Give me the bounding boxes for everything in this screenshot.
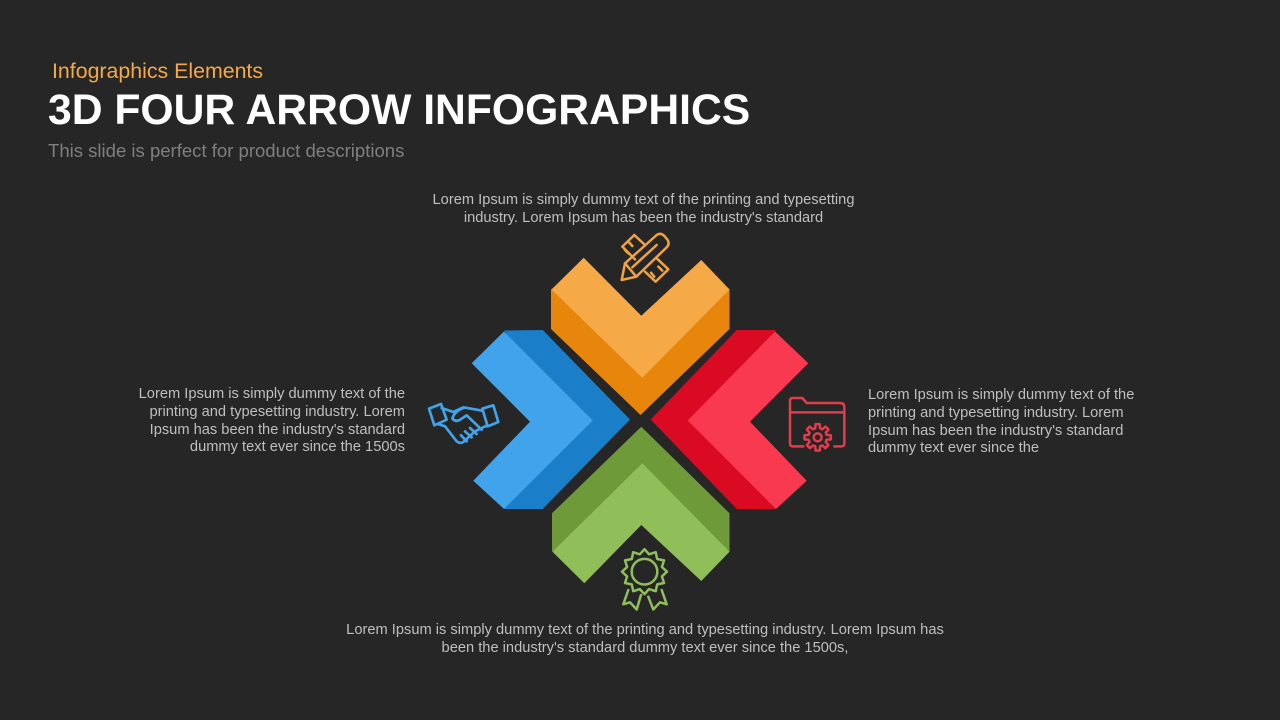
text block: left <box>139 386 405 455</box>
arrow: green, pointing up <box>552 427 730 583</box>
text block: right <box>868 387 1134 456</box>
text block: right: dummy text ever since the <box>868 440 1039 456</box>
arrow: blue, pointing right <box>472 330 630 509</box>
text block: right: Lorem Ipsum is simply dummy text of the <box>868 387 1134 403</box>
icon: folder with gear <box>790 398 844 450</box>
title: 3D FOUR ARROW INFOGRAPHICS <box>48 86 750 134</box>
text block: left: printing and typesetting industry. Lorem <box>149 404 405 420</box>
text block: top: Lorem Ipsum is simply dummy text of the printing and typesetting <box>433 192 854 208</box>
text block: right: Ipsum has been the industry's standard <box>868 423 1123 439</box>
text block: top: industry. Lorem Ipsum has been the industry's standard <box>464 210 823 226</box>
subtitle: This slide is perfect for product descriptions <box>48 140 404 160</box>
icon: pencil and ruler <box>622 234 669 282</box>
text block: bottom: Lorem Ipsum is simply dummy text of the printing and typesetting industry. Lorem Ipsum has <box>346 622 944 638</box>
text block: bottom <box>346 622 944 656</box>
arrow: orange, pointing down <box>551 258 730 415</box>
eyebrow heading: Infographics Elements <box>52 59 263 83</box>
text block: left: Ipsum has been the industry's standard <box>150 422 405 438</box>
text block: left: dummy text ever since the 1500s <box>190 439 405 455</box>
icon: handshake <box>429 404 498 443</box>
text block: bottom: been the industry's standard dummy text ever since the 1500s, <box>442 640 848 656</box>
text block: right: printing and typesetting industry. Lorem <box>868 405 1124 421</box>
icon: award rosette <box>622 549 667 610</box>
text block: top <box>433 192 854 226</box>
text block: left: Lorem Ipsum is simply dummy text of the <box>139 386 405 402</box>
arrow: red, pointing left <box>651 330 808 509</box>
